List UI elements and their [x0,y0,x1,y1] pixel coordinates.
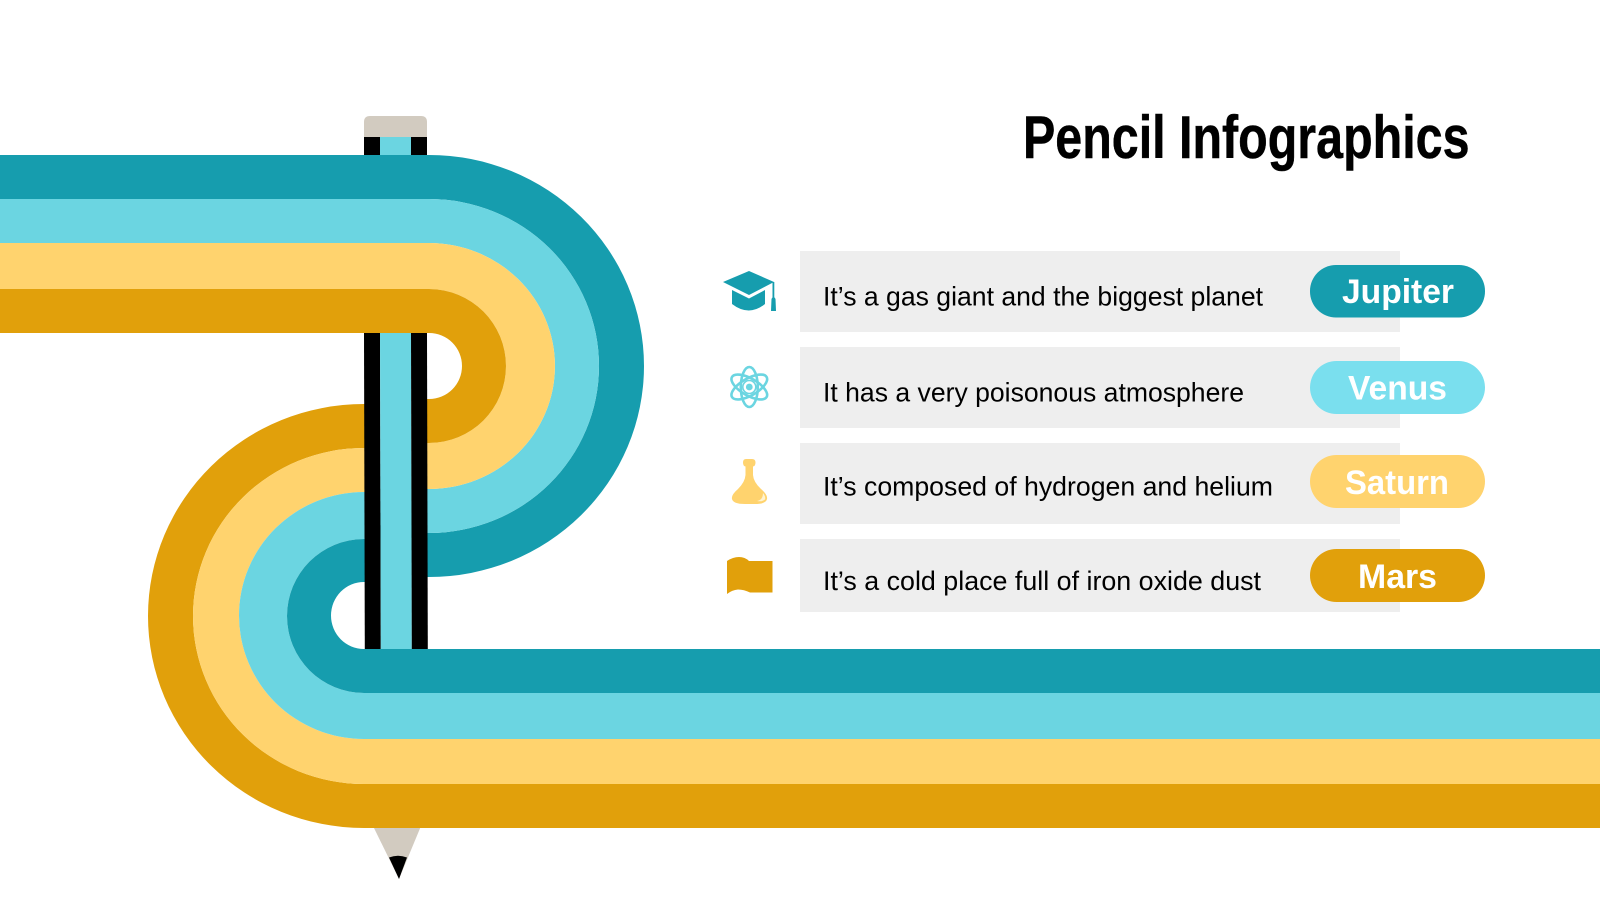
row: Jupiter [723,251,1485,332]
row 3 panel [800,443,1400,524]
icon: flask [732,459,767,504]
icon: graduation cap [723,271,776,311]
title: Pencil Infographics [1023,104,1470,171]
label: Jupiter: Jupiter [1342,273,1454,311]
row 2 text: It has a very poisonous atmosphere [823,377,1244,407]
upper ribbon: teal band [0,155,644,577]
label: Venus: Venus [1348,370,1447,408]
row 1 text: It’s a gas giant and the biggest planet [823,282,1263,312]
row: Saturn [732,443,1485,524]
pill: Mars [1310,549,1485,602]
row 2 panel [800,347,1400,428]
pencil tip [373,826,421,879]
lower ribbon: yellow band [193,448,1600,784]
row 3 text: It’s composed of hydrogen and helium [823,471,1273,501]
icon: atom [728,367,771,407]
row 1 panel [800,251,1400,332]
lower ribbon: teal band [287,539,1600,693]
label: Mars: Mars [1358,558,1437,596]
row: Venus [728,347,1485,428]
row: Mars [727,539,1485,612]
pill: Venus [1310,361,1485,414]
upper ribbon: cyan band [0,199,599,533]
lower ribbon: cyan band [239,492,1600,739]
upper ribbon: yellow band [0,243,555,489]
pencil top body [364,137,427,158]
row 4 text: It’s a cold place full of iron oxide dust [823,566,1261,596]
upper ribbon: gold band [0,289,506,443]
icon: flag [727,557,772,594]
pill: Saturn [1310,455,1485,508]
row 4 panel [800,539,1400,612]
pencil middle body [364,333,428,649]
pencil eraser cap [364,116,427,137]
pill: Jupiter [1310,265,1485,318]
lower ribbon: gold band [148,404,1600,828]
label: Saturn: Saturn [1345,464,1449,502]
